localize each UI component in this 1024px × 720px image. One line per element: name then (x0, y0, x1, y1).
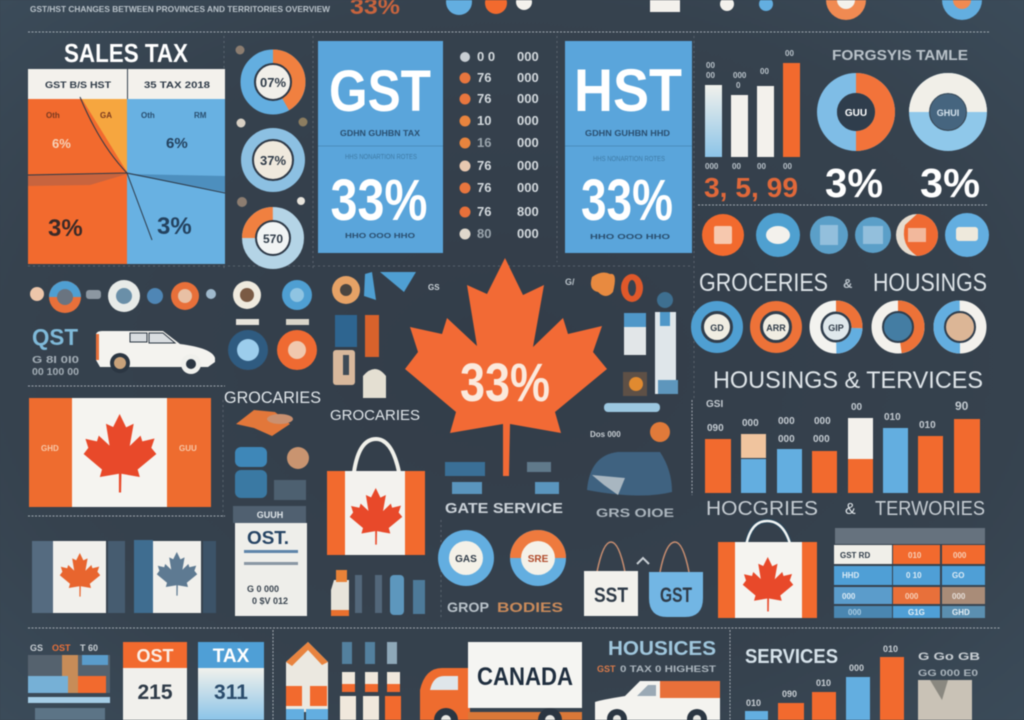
collage: icons beside leaf left: GS (428, 283, 440, 292)
bar chart: middle right: 000 (742, 418, 759, 429)
table: territories: HHD (842, 571, 860, 580)
bar chart: top right: 000 (733, 71, 747, 80)
panel: notes bottom right (918, 651, 980, 720)
panel: sales tax: GST B/S HST (45, 80, 112, 90)
panel: rate table rows: 10 (477, 113, 491, 128)
icon: shopping bag with flag (327, 439, 425, 555)
panel: OST: 215 (137, 681, 173, 704)
icon: white van (595, 681, 720, 720)
bar chart: top right: 00 (783, 162, 792, 171)
panel: sales tax: Oth (141, 111, 155, 120)
bar chart: middle right: 090 (707, 423, 724, 434)
flag: Canada (29, 398, 211, 507)
panel: GST: 33% (330, 168, 428, 233)
table: territories: 000 (842, 592, 856, 601)
donut row: right: GIP (828, 323, 844, 333)
bar chart: top right: 00 (706, 71, 715, 80)
panel: TAX: 311 (214, 681, 248, 704)
label: GST left: QST (32, 324, 78, 350)
icon: large bag with flag (718, 521, 817, 618)
flag: Canada: GHD (41, 444, 59, 453)
bar chart: top right: 00 (760, 67, 769, 76)
collage: bottom centre (445, 452, 672, 496)
bar chart: services: 010 (883, 644, 898, 654)
panel: rate table rows: 000 (517, 158, 539, 173)
bar chart: middle right: 000 (778, 416, 795, 427)
heading: hocgries and terwories: & (845, 501, 856, 518)
receipt: GST (233, 506, 307, 616)
heading: groceries and housings: HOUSINGS (873, 269, 987, 297)
panel: rate table rows: 800 (517, 204, 539, 219)
panel: rate table rows: 000 (517, 180, 539, 195)
donut charts: left column: 570 (263, 232, 283, 246)
panel: sales tax (28, 38, 225, 264)
donut charts: left column (236, 46, 308, 262)
donut row: right (696, 306, 981, 348)
panel: sales tax: GA (100, 111, 112, 120)
panel: HST (565, 41, 692, 253)
bar chart: middle right: 000 (814, 416, 831, 427)
icon: white car (96, 331, 215, 374)
donut charts: top right: FORGSYIS TAMLE (832, 47, 968, 64)
bar chart: top right: 00 (706, 61, 715, 70)
bar chart: services: 090 (782, 689, 797, 699)
panel: HST: GDHN GUHBN HHD (585, 129, 670, 138)
heading: hoseices: HOUSICES (608, 638, 716, 660)
heading: hocgries and terwories: TERWORIES (875, 498, 985, 520)
label: gate services (445, 500, 674, 520)
bar chart: middle right: 010 (919, 420, 936, 431)
collage: icons beside leaf right: Dos 000 (590, 430, 621, 439)
bar chart: middle right: 000 (813, 434, 830, 445)
panel: rate table rows: 16 (477, 135, 491, 150)
bar chart: services: 010 (816, 678, 831, 688)
table: territories: 000 (952, 592, 966, 601)
table: territories: 0 10 (906, 571, 922, 580)
bar chart: services (745, 644, 904, 720)
panel: rate table rows: 76 (477, 91, 491, 106)
panel: OST: OST (136, 646, 174, 666)
icon: delivery truck with Canada sign: CANADA (477, 663, 573, 691)
panel: HST: HHS NONARTION ROTES (593, 156, 665, 163)
panel: sales tax: 6% (166, 135, 188, 152)
panel: HST: HST (574, 57, 682, 124)
panel: GST: GDHN GUHBN TAX (340, 129, 421, 138)
panel: sales tax: 6% (52, 136, 71, 151)
heading: housings and services: HOUSINGS & TERVICES (713, 367, 983, 394)
receipt: GST: 0 $V 012 (252, 596, 288, 606)
heading: groceries and housings: GROCERIES (699, 269, 828, 297)
table: territories: 010 (908, 551, 922, 560)
icons: SST bags: SST (594, 584, 628, 607)
heading: hoseices: GST (597, 664, 616, 674)
panel: sales tax: 3% (48, 215, 83, 242)
icon: big maple leaf with 33% (405, 258, 607, 476)
bar chart: top right: 00 (732, 162, 741, 171)
panel: rate table rows: 76 (477, 158, 491, 173)
heading: hoseices (597, 638, 717, 674)
table: territories: G1G (908, 608, 925, 617)
panel: rate table rows: 0 0 (477, 49, 495, 64)
top strip: cropped header row: GST/HST CHANGES BETWEEN PROVINCES AND TERRITORIES OVERVIEW (30, 4, 331, 14)
table: territories: 000 (848, 608, 862, 617)
panel: bottom left sales: T 60 (80, 643, 98, 653)
bar chart: middle right: GSI (706, 399, 723, 410)
panel: rate table rows: 76 (477, 70, 491, 85)
bar chart: services: 000 (849, 663, 864, 673)
flag: Canada: GUU (179, 444, 197, 453)
donut charts: left column: 37% (260, 153, 286, 168)
donut charts: top right: GHUI (937, 108, 959, 118)
bar chart: middle right: 90 (955, 399, 969, 413)
panel: flags row (32, 540, 216, 613)
donut row: right: ARR (766, 323, 786, 333)
panel: sales tax: RM (194, 111, 207, 120)
icon: big maple leaf with 33%: 33% (460, 353, 550, 413)
heading: groceries and housings (699, 269, 987, 297)
table: territories (834, 528, 985, 618)
collage: groceries (224, 388, 321, 500)
donut charts: top right: GUU (845, 108, 867, 119)
label: GST left: 00 100 00 (32, 367, 79, 378)
bar chart: top right: 00 (757, 162, 766, 171)
receipt: GST: G 0 000 (247, 584, 279, 594)
panel: bottom left sales: GS (30, 643, 43, 653)
table: territories: GST RD (840, 551, 870, 560)
collage: icons beside leaf left: GROCARIES (330, 407, 420, 424)
table: territories: 000 (953, 551, 967, 560)
panel: GST: HHO OOO HHO (345, 233, 416, 240)
heading: sales tax: SALES TAX (64, 38, 189, 68)
panel: sales tax: 3% (157, 213, 192, 240)
panel: TAX: TAX (213, 646, 250, 667)
table: territories: GHD (952, 608, 970, 617)
bar chart: top right: 000 (705, 162, 719, 171)
panel: rate table rows: 000 (517, 226, 539, 241)
icons: two circles centre (438, 530, 566, 586)
panel: TAX (198, 642, 264, 720)
heading: groceries and housings: & (843, 276, 852, 291)
label: GST left (32, 324, 80, 378)
icons: columns (340, 642, 401, 720)
panel: notes bottom right: G Go GB (918, 651, 980, 663)
row of small icons: left (30, 280, 317, 370)
label: gate services: GRS OIOE (596, 506, 674, 520)
panel: rate table rows: 000 (517, 49, 539, 64)
donut charts: left column: 07% (260, 75, 286, 90)
donut row: right: GD (710, 323, 724, 333)
bar chart: top right: 3, 5, 99 (704, 172, 798, 203)
collage: icons beside leaf right: G/ (565, 277, 575, 287)
top strip: cropped header row (30, 0, 982, 20)
panel: HST: 33% (581, 168, 673, 233)
bar chart: middle right (705, 399, 980, 493)
donut charts: top right (825, 47, 980, 206)
panel: bottom left sales: OST (52, 643, 71, 653)
panel: rate table rows: 80 (477, 226, 491, 241)
icons: bottles (331, 570, 425, 616)
bar chart: middle right: 010 (884, 412, 901, 423)
panel: rate table rows: 76 (477, 180, 491, 195)
bar chart: middle right: 00 (851, 402, 863, 413)
bar chart: top right: 0 (736, 81, 741, 90)
label: gate services: GATE SERVICE (445, 500, 563, 517)
bar chart: services: 010 (746, 698, 761, 708)
icons: SST bags: GST (660, 584, 692, 607)
panel: rate table rows (460, 49, 539, 241)
receipt: GST: GUUH (257, 510, 283, 520)
receipt: GST: OST. (247, 528, 289, 548)
collage: icons beside leaf right (565, 273, 678, 442)
panel: GST (318, 41, 443, 253)
heading: hocgries and terwories (706, 498, 985, 520)
panel: bottom left sales (28, 643, 110, 720)
bar chart: middle right: 000 (778, 434, 795, 445)
collage: icons beside leaf left (330, 272, 440, 424)
panel: rate table rows: 000 (517, 113, 539, 128)
panel: rate table rows: 76 (477, 204, 491, 219)
icon: house (286, 642, 328, 720)
icons: two circles centre: SRE (528, 554, 549, 565)
label: goods: BODIES (497, 599, 563, 615)
panel: rate table rows: 000 (517, 91, 539, 106)
bar chart: top right (704, 49, 800, 203)
bar chart: top right: 00 (785, 49, 794, 58)
icons: two circles centre: GAS (455, 554, 477, 565)
icon: delivery truck with Canada sign (420, 642, 582, 720)
panel: OST (123, 642, 187, 720)
bar chart: services: SERVICES (745, 646, 838, 668)
table: territories: 000 (905, 592, 919, 601)
label: goods: GROP (447, 599, 489, 615)
panel: GST: GST (329, 59, 431, 124)
panel: HST: HHO OOO HHO (590, 234, 671, 241)
heading: hocgries and terwories: HOCGRIES (706, 498, 818, 520)
table: territories: GO (952, 571, 964, 580)
icon row: right (702, 213, 989, 257)
panel: rate table rows: 000 (517, 135, 539, 150)
donut charts: top right: 3% (920, 160, 980, 206)
icons: SST bags (584, 542, 703, 617)
panel: notes bottom right: GG 000 E0 (918, 668, 978, 678)
heading: hoseices: 0 TAX 0 HIGHEST (620, 664, 717, 674)
panel: GST: HHS NONARTION ROTES (345, 154, 417, 161)
panel: rate table rows: 000 (517, 70, 539, 85)
label: GST left: G 8I 0I0 (32, 355, 80, 366)
collage: groceries: GROCARIES (224, 388, 321, 407)
label: goods (447, 599, 563, 615)
panel: sales tax: Oth (46, 111, 60, 120)
panel: sales tax: 35 TAX 2018 (144, 80, 210, 90)
donut charts: top right: 3% (825, 160, 883, 206)
